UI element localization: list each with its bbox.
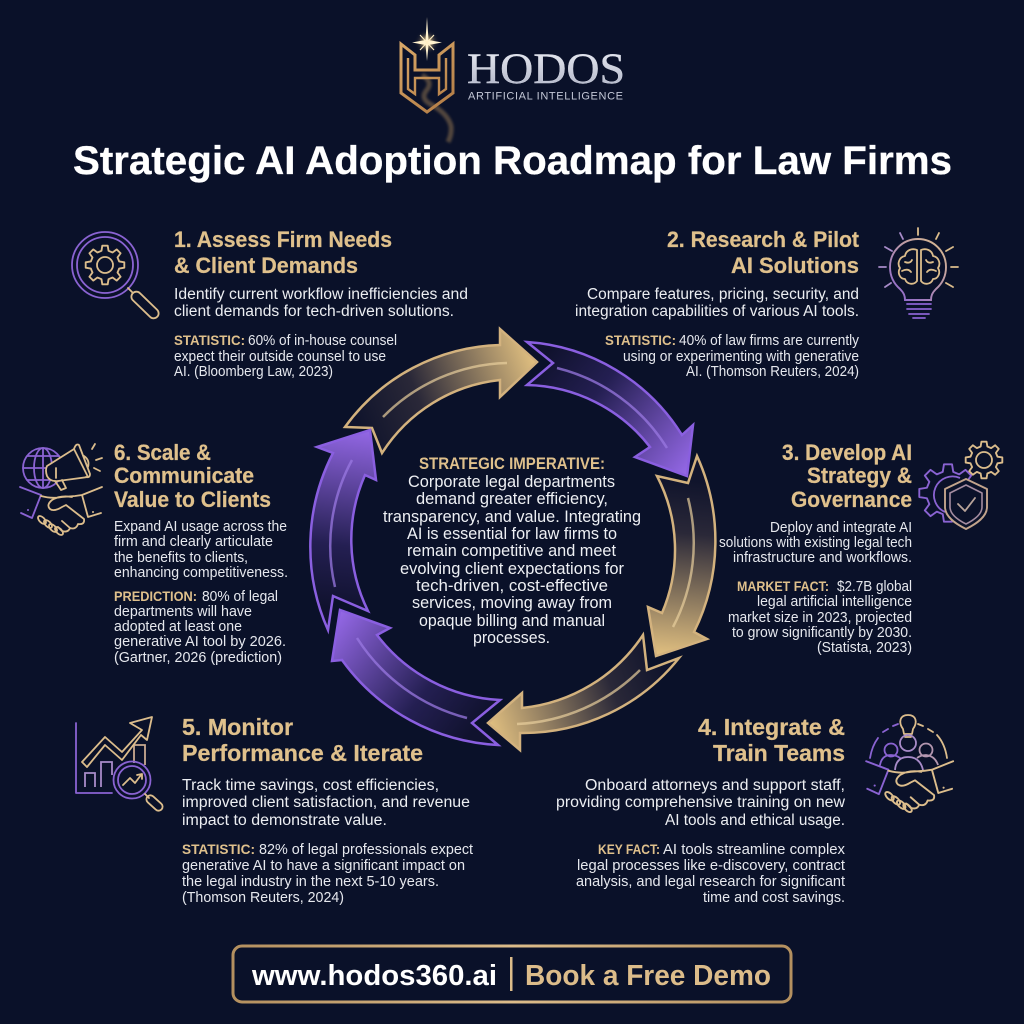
panel: step 5 bbox=[76, 714, 473, 906]
center text: strategic imperative: STRATEGIC IMPERATIVE: bbox=[419, 454, 605, 473]
center text: strategic imperative: evolving client expectations for bbox=[400, 559, 624, 578]
center text: strategic imperative: tech-driven, cost-effective bbox=[416, 576, 608, 595]
description: solutions with existing legal tech bbox=[719, 535, 912, 551]
icon: gears with shield bbox=[919, 442, 1002, 529]
heading: 1. Assess Firm Needs bbox=[174, 227, 392, 252]
icon: team with handshake and idea bulb bbox=[866, 715, 953, 814]
center text: strategic imperative: Corporate legal departments bbox=[408, 472, 615, 491]
statistic bbox=[174, 332, 397, 380]
market fact: (Statista, 2023) bbox=[817, 640, 912, 656]
logo: Hodos Artificial Intelligence bbox=[401, 17, 625, 142]
description: Compare features, pricing, security, and bbox=[587, 286, 859, 303]
description: Deploy and integrate AI bbox=[770, 520, 912, 536]
market fact: market size in 2023, projected bbox=[728, 610, 912, 626]
statistic: 82% of legal professionals expect bbox=[259, 842, 473, 858]
icon part: handshake bbox=[866, 761, 953, 814]
description bbox=[174, 286, 468, 320]
market fact: $2.7B global bbox=[837, 579, 912, 595]
heading: Performance & Iterate bbox=[182, 740, 423, 766]
arrow: step 4 to 5 bbox=[488, 635, 679, 750]
panel: step 1 bbox=[72, 227, 468, 380]
panel: step 6 bbox=[20, 440, 288, 666]
button frame bbox=[233, 946, 791, 1002]
statistic: STATISTIC: bbox=[174, 332, 245, 348]
market fact: legal artificial intelligence bbox=[757, 594, 912, 610]
icon: light bulb with brain bbox=[879, 228, 958, 318]
description: Onboard attorneys and support staff, bbox=[585, 777, 845, 794]
key fact: analysis, and legal research for significant bbox=[576, 874, 845, 890]
key fact: AI tools streamline complex bbox=[663, 842, 845, 858]
footer call to action bbox=[233, 946, 791, 1002]
divider bbox=[510, 957, 512, 991]
heading: 2. Research & Pilot bbox=[667, 227, 860, 252]
statistic: 40% of law firms are currently bbox=[679, 333, 860, 349]
arrow: step 3 to 4 bbox=[648, 456, 715, 656]
description: Track time savings, cost efficiencies, bbox=[182, 777, 439, 794]
prediction: 80% of legal bbox=[202, 589, 278, 605]
market fact bbox=[728, 578, 912, 656]
center text: strategic imperative bbox=[383, 454, 641, 647]
heading bbox=[174, 227, 392, 278]
prediction bbox=[114, 588, 286, 666]
description: enhancing competitiveness. bbox=[114, 565, 288, 581]
heading bbox=[667, 227, 860, 278]
description bbox=[719, 520, 912, 566]
description: the benefits to clients, bbox=[114, 550, 248, 566]
statistic: STATISTIC: bbox=[605, 332, 676, 348]
statistic: 60% of in-house counsel bbox=[248, 333, 397, 349]
prediction: generative AI tool by 2026. bbox=[114, 634, 286, 650]
market fact: to grow significantly by 2030. bbox=[732, 625, 912, 641]
statistic bbox=[605, 332, 860, 380]
key fact: time and cost savings. bbox=[703, 890, 845, 906]
statistic: AI. (Thomson Reuters, 2024) bbox=[686, 364, 859, 380]
panel: step 4 bbox=[556, 714, 953, 906]
key fact: KEY FACT: bbox=[598, 841, 660, 857]
heading: 3. Develop AI bbox=[782, 440, 912, 465]
heading: & Client Demands bbox=[174, 253, 358, 278]
title: Strategic AI Adoption Roadmap for Law Firms bbox=[73, 139, 952, 183]
center text: strategic imperative: processes. bbox=[473, 628, 550, 647]
heading: 5. Monitor bbox=[182, 714, 293, 740]
prediction: (Gartner, 2026 (prediction) bbox=[114, 650, 282, 666]
arrow: step 2 to 3 bbox=[527, 342, 693, 476]
arrow: step 1 to 2 bbox=[345, 329, 537, 453]
description: client demands for tech-driven solutions. bbox=[174, 303, 454, 320]
statistic: using or experimenting with generative bbox=[623, 349, 859, 365]
website link: www.hodos360.ai bbox=[251, 960, 497, 992]
prediction: adopted at least one bbox=[114, 619, 242, 635]
heading: AI Solutions bbox=[731, 253, 859, 278]
heading: 4. Integrate & bbox=[698, 714, 845, 740]
heading bbox=[782, 440, 912, 512]
market fact: MARKET FACT: bbox=[737, 578, 829, 594]
description: impact to demonstrate value. bbox=[182, 812, 387, 829]
description: Identify current workflow inefficiencies and bbox=[174, 286, 468, 303]
icon: shield H monogram with star bbox=[401, 17, 453, 142]
tagline: ARTIFICIAL INTELLIGENCE bbox=[468, 90, 623, 102]
statistic: (Thomson Reuters, 2024) bbox=[182, 890, 344, 906]
statistic: STATISTIC: bbox=[182, 841, 255, 857]
description: firm and clearly articulate bbox=[114, 534, 273, 550]
key fact bbox=[576, 841, 845, 906]
panel: step 3 bbox=[719, 440, 1002, 656]
icon: magnifier with gear bbox=[72, 232, 161, 320]
heading: 6. Scale & bbox=[114, 440, 211, 465]
arrow: step 6 to 1 bbox=[310, 430, 376, 630]
center text: strategic imperative: transparency, and value. Integrating bbox=[383, 507, 641, 526]
arrow: step 5 to 6 bbox=[332, 610, 500, 745]
heading: Communicate bbox=[114, 463, 254, 488]
description: infrastructure and workflows. bbox=[733, 550, 912, 566]
description: improved client satisfaction, and revenue bbox=[182, 794, 470, 811]
book a demo: Book a Free Demo bbox=[525, 960, 771, 992]
heading: Value to Clients bbox=[114, 487, 271, 512]
statistic bbox=[182, 841, 473, 906]
wordmark: HODOS: HODOS bbox=[467, 46, 625, 93]
heading bbox=[698, 714, 845, 766]
description bbox=[182, 777, 470, 829]
description: Expand AI usage across the bbox=[114, 519, 287, 535]
icon: globe, megaphone and handshake bbox=[20, 444, 102, 536]
description bbox=[575, 286, 859, 320]
key fact: legal processes like e-discovery, contract bbox=[577, 858, 845, 874]
icon: growth chart with magnifier bbox=[76, 717, 164, 812]
description: providing comprehensive training on new bbox=[556, 794, 846, 811]
center text: strategic imperative: remain competitive and meet bbox=[407, 541, 616, 560]
description bbox=[114, 519, 288, 581]
heading bbox=[114, 440, 271, 512]
statistic: expect their outside counsel to use bbox=[174, 349, 386, 365]
center text: strategic imperative: demand greater efficiency, bbox=[416, 489, 608, 508]
panel: step 2 bbox=[575, 227, 958, 380]
description bbox=[556, 777, 846, 829]
heading: Train Teams bbox=[713, 740, 845, 766]
center text: strategic imperative: AI is essential for law firms to bbox=[407, 524, 617, 543]
prediction: PREDICTION: bbox=[114, 588, 197, 604]
heading: Strategy & bbox=[807, 463, 912, 488]
description: AI tools and ethical usage. bbox=[665, 812, 845, 829]
statistic: the legal industry in the next 5-10 years. bbox=[182, 874, 439, 890]
statistic: AI. (Bloomberg Law, 2023) bbox=[174, 364, 333, 380]
cycle diagram: six arrows bbox=[310, 329, 715, 750]
heading: Governance bbox=[791, 487, 912, 512]
center text: strategic imperative: opaque billing and manual bbox=[419, 611, 605, 630]
center text: strategic imperative: services, moving away from bbox=[412, 593, 612, 612]
prediction: departments will have bbox=[114, 604, 252, 620]
description: integration capabilities of various AI tools. bbox=[575, 303, 859, 320]
statistic: generative AI to have a significant impact on bbox=[182, 858, 465, 874]
heading bbox=[182, 714, 423, 766]
